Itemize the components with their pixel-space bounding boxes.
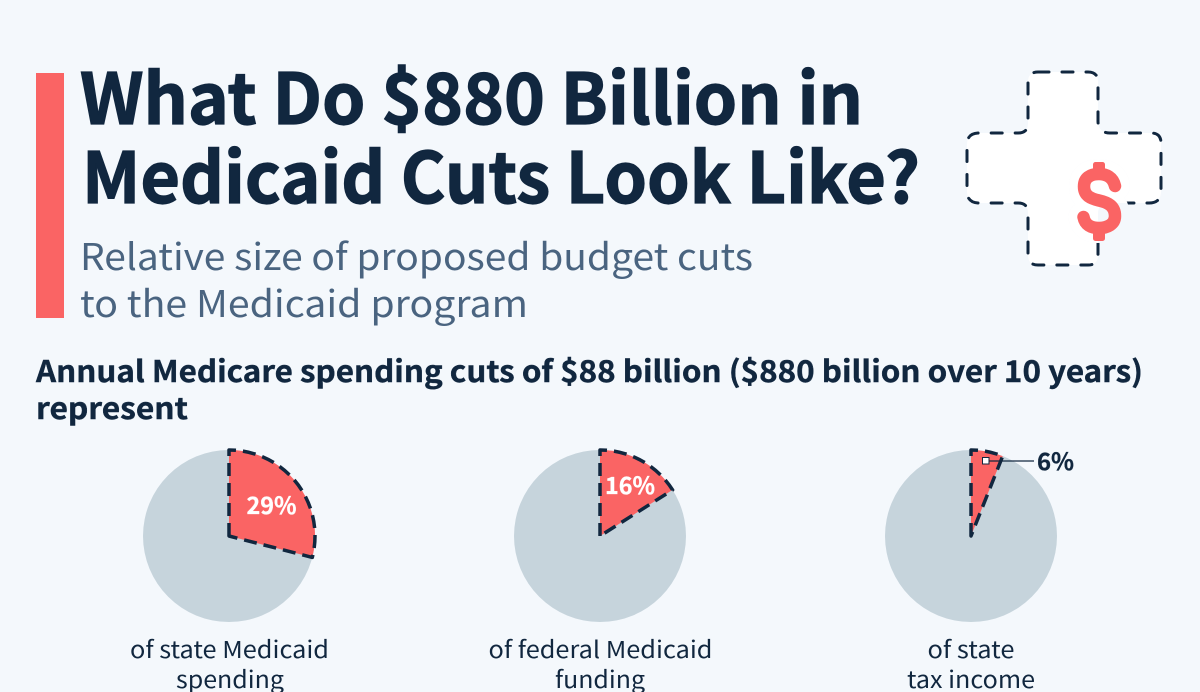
caption: federal Medicaid funding: of federal Medicaid xyxy=(488,631,712,665)
subtitle xyxy=(80,228,753,328)
caption: federal Medicaid funding xyxy=(488,631,712,692)
section heading: represent xyxy=(36,386,188,428)
pie chart: 16% of federal Medicaid funding: 16% xyxy=(605,467,655,501)
title: Medicaid Cuts Look Like? xyxy=(82,123,920,224)
section heading: Annual Medicare spending cuts of $88 billion ($880 billion over 10 years) xyxy=(35,349,1143,391)
title: What Do $880 Billion in xyxy=(80,44,863,145)
pie chart: 16% of federal Medicaid funding xyxy=(514,450,686,622)
title accent bar xyxy=(36,73,64,318)
caption: state tax income: of state xyxy=(928,631,1014,665)
caption: state Medicaid spending xyxy=(130,631,329,692)
title xyxy=(80,44,920,224)
caption: state tax income xyxy=(907,631,1035,692)
section heading xyxy=(35,349,1143,428)
pie chart: 6% of state tax income xyxy=(885,443,1074,622)
pie chart: 29% of state Medicaid spending: 29% xyxy=(246,487,296,521)
subtitle: Relative size of proposed budget cuts xyxy=(80,228,753,281)
icon: medical cross with dollar sign xyxy=(967,72,1161,265)
pie chart: 29% of state Medicaid spending xyxy=(143,450,315,622)
subtitle: to the Medicaid program xyxy=(80,275,528,328)
caption: state Medicaid spending: of state Medicaid xyxy=(130,631,329,665)
pie chart: 6% of state tax income: 6% xyxy=(1037,443,1074,477)
